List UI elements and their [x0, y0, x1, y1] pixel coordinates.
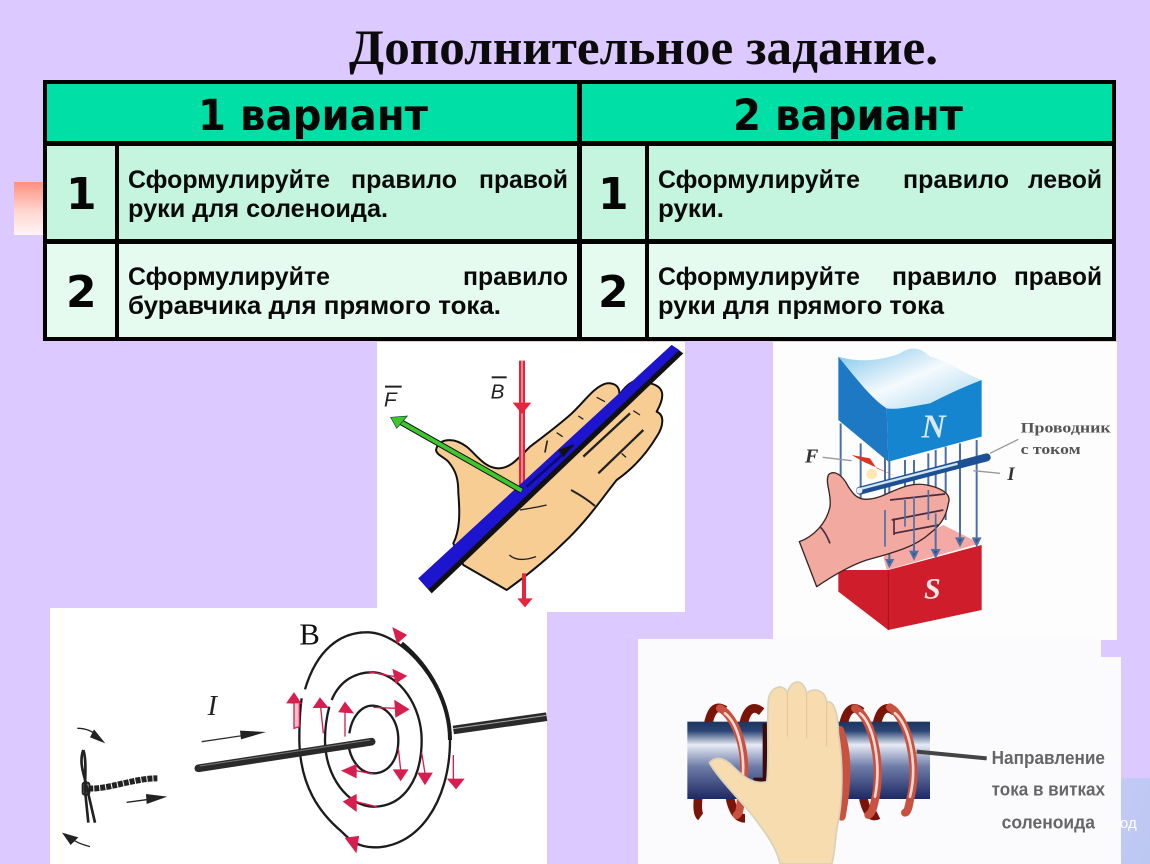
table: [43, 80, 1116, 341]
labels: F: [804, 446, 818, 468]
row numbers: 2: [598, 267, 629, 318]
hand: [709, 682, 842, 864]
annotation text: тока в витках: [992, 779, 1106, 800]
red arrow B upper: [513, 361, 531, 487]
labels: с током: [1021, 442, 1081, 458]
field lines: [841, 423, 980, 566]
annotation text: соленоида: [1002, 811, 1096, 832]
image: left hand rule with conductor: [377, 342, 685, 612]
label B: B: [299, 618, 320, 652]
S magnet: S: [924, 572, 941, 605]
row 1 cells: [47, 146, 1112, 239]
finger creases: [820, 490, 945, 553]
field circles: [299, 632, 450, 847]
variant 1 question 1: правило: [351, 166, 457, 194]
labels F B I: [384, 377, 548, 457]
cylinder: [687, 722, 930, 799]
variant 2 question 2: правой: [1014, 263, 1102, 291]
N magnet: N: [921, 408, 948, 445]
N magnet: [838, 349, 982, 462]
current arrow: [202, 731, 266, 742]
leader lines: [823, 439, 1018, 473]
wire: [198, 715, 547, 768]
blue conductor: [418, 345, 683, 593]
header cells: [47, 84, 1112, 141]
variant 2 question 2: [658, 263, 1102, 320]
labels: Проводник: [1021, 421, 1111, 437]
row 2 cells: [47, 244, 1112, 337]
header: variant 1: 1 вариант: [198, 91, 428, 141]
decorative pink block: [14, 182, 44, 235]
variant 2 question 1: Сформулируйте: [658, 166, 860, 194]
bottom-right blue patch: од: [1120, 815, 1137, 832]
gimlet: [82, 750, 157, 823]
hand creases: [509, 397, 643, 560]
inner dark coil band: [753, 723, 765, 780]
labels: [804, 421, 1111, 485]
row numbers: 2: [66, 267, 97, 318]
image: magnet with conductor: [773, 342, 1117, 640]
row numbers: 1: [598, 169, 629, 220]
lead wire: [917, 752, 987, 758]
variant 1 question 1: правой: [479, 166, 568, 194]
row numbers: 1: [66, 169, 97, 220]
variant 1 question 2: Сформулируйте: [128, 263, 330, 291]
annotation text: [992, 747, 1106, 832]
variant 2 question 2: руки для прямого тока: [658, 292, 945, 320]
hand: [436, 380, 662, 590]
label I: I: [207, 691, 219, 722]
variant 2 question 1: левой: [1028, 166, 1102, 194]
variant 2 question 1: правило: [903, 166, 1009, 194]
front coil turns: [720, 707, 913, 817]
labels F B I: F: [384, 389, 398, 412]
image: right hand on solenoid: [638, 639, 1121, 864]
image: gimlet rule with circular field: [50, 608, 547, 864]
title: Дополнительное задание.: [349, 19, 938, 75]
conductor: [856, 457, 987, 494]
variant 2 question 1: руки.: [658, 195, 724, 223]
labels F B I: B: [491, 381, 505, 404]
header: variant 2: 2 вариант: [733, 91, 963, 141]
small rotation arrows: [62, 728, 167, 847]
green arrow F: [391, 416, 522, 491]
variant 2 question 1: [658, 166, 1102, 223]
variant 1 question 2: буравчика для прямого тока.: [128, 292, 501, 320]
red arrow B lower: [517, 573, 533, 607]
variant 2 question 2: Сформулируйте: [658, 263, 860, 291]
annotation text: Направление: [992, 747, 1105, 768]
labels F B I: I: [543, 437, 548, 457]
S magnet: [838, 525, 982, 630]
row numbers: [66, 169, 629, 318]
variant 1 question 1: руки для соленоида.: [128, 195, 388, 223]
bottom-right blue patch: [1120, 778, 1150, 864]
pink hand: [799, 473, 949, 587]
crimson direction arrows: [287, 628, 463, 852]
back coil turns: [698, 708, 895, 818]
force arrow: [852, 455, 898, 479]
labels: I: [1006, 464, 1015, 485]
variant 1 question 1: [128, 166, 568, 223]
variant 1 question 1: Сформулируйте: [128, 166, 330, 194]
variant 2 question 2: правило: [892, 263, 997, 291]
variant 1 question 2: [128, 263, 568, 320]
variant 1 question 2: правило: [463, 263, 568, 291]
